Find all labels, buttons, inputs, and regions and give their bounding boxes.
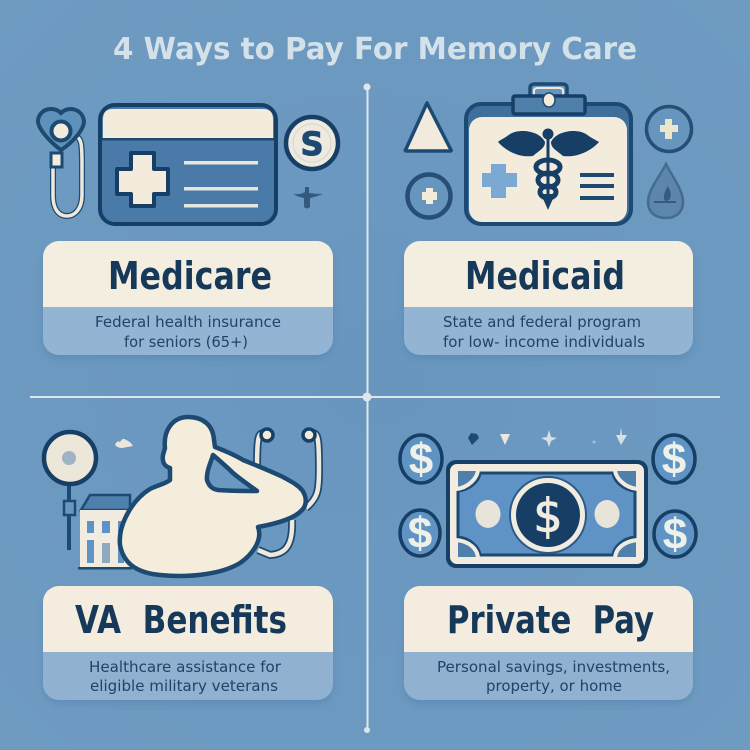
icon: water drop — [648, 164, 683, 218]
icon: sparkles — [468, 427, 627, 447]
heading: Medicare — [108, 254, 272, 298]
vertical divider — [362, 84, 372, 733]
icon: dollar coins: $ — [409, 435, 433, 484]
icon: triangle — [405, 103, 451, 151]
icon: banknote — [446, 460, 648, 568]
title: 4 Ways to Pay For Memory Care — [113, 32, 637, 67]
icon: dollar coins — [400, 435, 696, 559]
caduceus — [498, 128, 599, 210]
panel: Medicare — [38, 105, 338, 359]
description: Healthcare assistance for — [89, 658, 282, 676]
panel: Private Pay — [400, 427, 696, 704]
icon: building — [78, 495, 132, 570]
horizontal divider — [30, 396, 720, 398]
description — [443, 313, 645, 351]
heading: VA Benefits — [75, 598, 287, 642]
panel: Medicaid — [404, 84, 693, 359]
icon: stethoscope tubes — [257, 429, 319, 555]
icon: saluting veteran silhouette — [120, 417, 306, 576]
card: Private Pay — [404, 586, 693, 704]
icon: dollar coins: $ — [663, 510, 687, 559]
description: Federal health insurance — [95, 313, 281, 331]
card: VA Benefits — [43, 586, 333, 704]
description: eligible military veterans — [90, 677, 278, 695]
description — [95, 313, 281, 351]
icon: coin — [286, 117, 338, 169]
heading: Private Pay — [447, 598, 654, 642]
icon: insurance card — [100, 105, 276, 224]
icon: clipboard — [466, 84, 631, 224]
icon: dollar coins: $ — [408, 509, 432, 558]
description: for seniors (65+) — [124, 333, 248, 351]
icon: coin: S — [300, 125, 324, 163]
description: property, or home — [486, 677, 622, 695]
icon: banknote: $ — [533, 489, 563, 543]
description: Personal savings, investments, — [437, 658, 670, 676]
description — [437, 658, 670, 695]
icon: small cloud — [115, 439, 133, 448]
card: Medicaid — [404, 241, 693, 359]
icon: stethoscope — [38, 109, 84, 216]
icon: plus circle left — [408, 174, 450, 218]
card: Medicare — [43, 241, 333, 359]
icon: magnifier stethoscope head — [44, 432, 96, 550]
icon: plus circle right — [646, 106, 692, 152]
icon: dollar coins: $ — [662, 435, 686, 484]
panel: VA Benefits — [43, 417, 333, 704]
heading: Medicaid — [465, 254, 625, 298]
description: State and federal program — [443, 313, 641, 331]
icon: small plus — [293, 187, 323, 208]
description — [89, 658, 282, 695]
description: for low- income individuals — [443, 333, 645, 351]
